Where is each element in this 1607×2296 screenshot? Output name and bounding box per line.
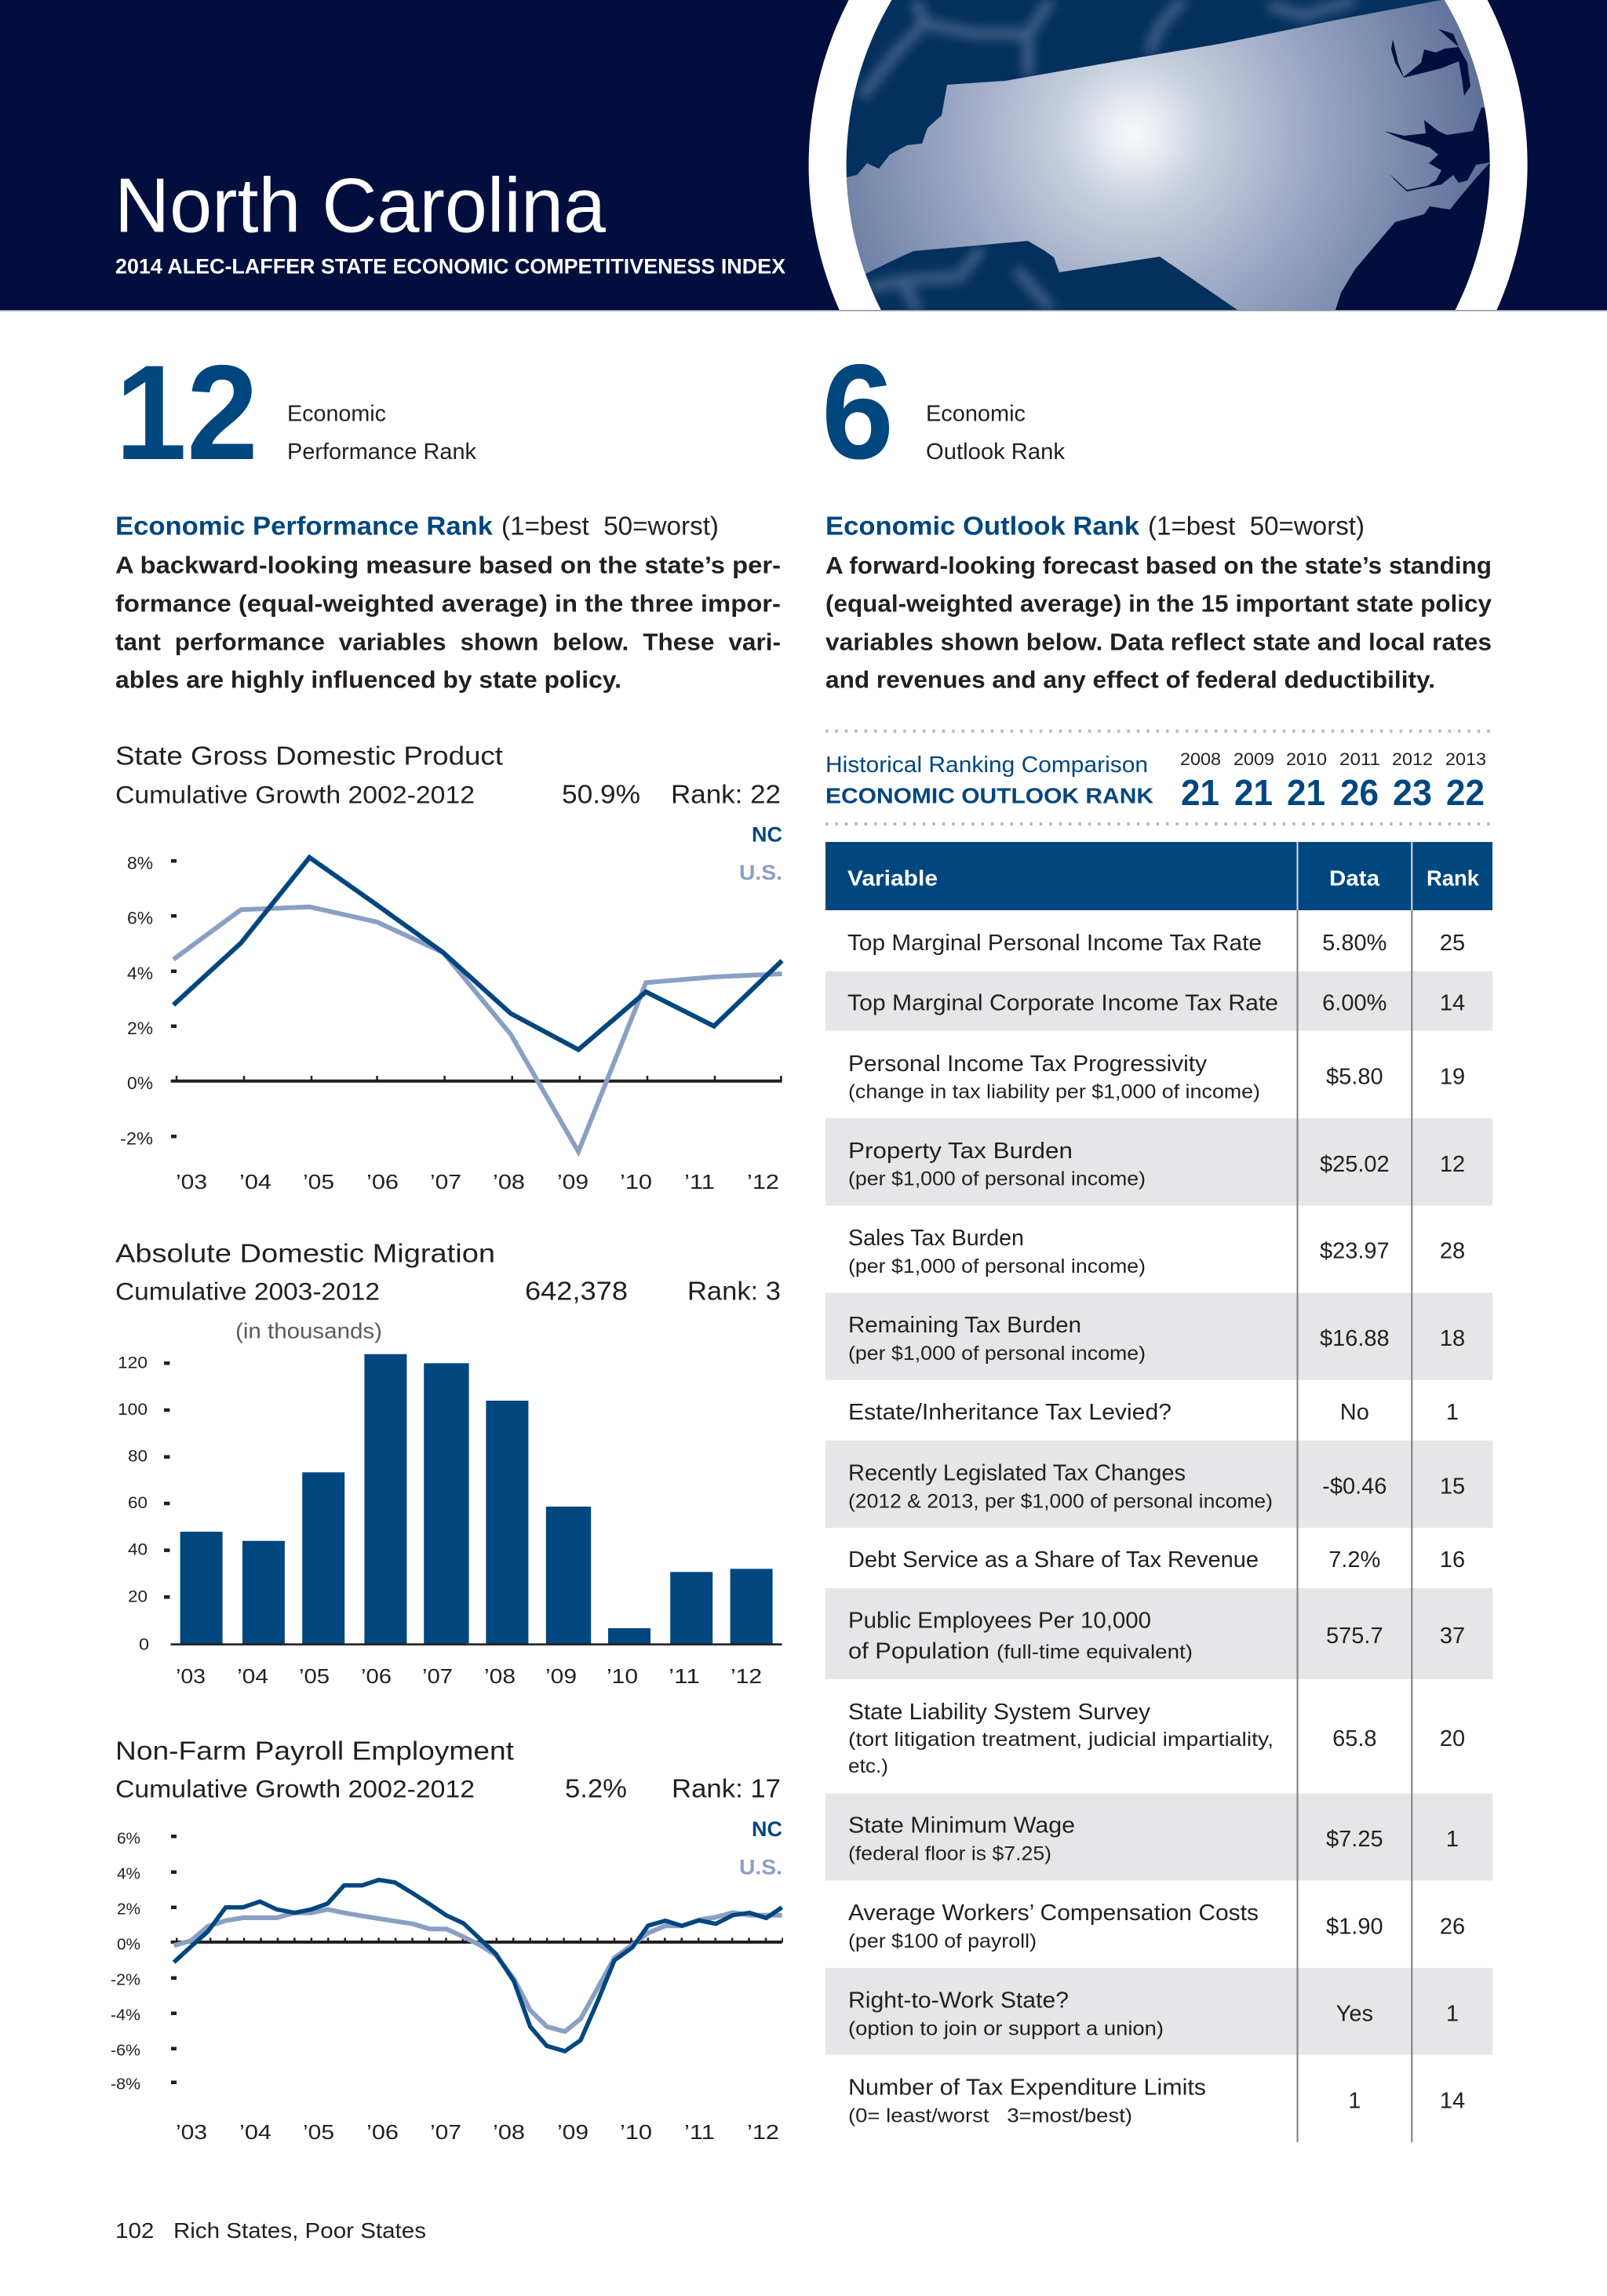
chart heading: domestic migration: (in thousands) [235, 1319, 382, 1343]
title: North Carolina [115, 162, 606, 249]
line chart: payroll employment: -6% [111, 2042, 140, 2059]
rank: economic outlook [822, 337, 1065, 487]
row: recent tax changes: Recently Legislated Tax Changes [848, 1460, 1186, 1485]
text block: performance rank description: Economic Performance Rank [115, 512, 494, 541]
line chart: state GDP growth: ’08 [493, 1170, 525, 1194]
row: liability survey: 65.8 [1332, 1726, 1377, 1751]
row: workers compensation: Average Workers’ Compensation Costs [848, 1901, 1259, 1926]
line chart: state GDP growth: ’06 [366, 1170, 399, 1194]
historical ranking comparison: 2008 [1180, 749, 1221, 769]
line chart: payroll employment: 4% [117, 1864, 140, 1883]
chart heading: state GDP: Cumulative Growth 2002-2012 [115, 780, 475, 808]
bar chart: domestic migration: ’09 [545, 1664, 577, 1688]
line chart: payroll employment: ’07 [430, 2120, 461, 2144]
text block: performance rank description: (1=best 50=worst) [501, 512, 719, 541]
historical ranking comparison: Historical Ranking Comparison [825, 753, 1148, 778]
row: remaining tax: 18 [1440, 1326, 1465, 1351]
historical ranking comparison: 2011 [1339, 749, 1380, 769]
text block: outlook rank description: (equal-weighted average) in the 15 important state policy [825, 589, 1492, 617]
row: recent tax changes: (2012 & 2013, per $1,000 of personal income) [848, 1490, 1273, 1512]
row: sales tax: $23.97 [1320, 1239, 1390, 1264]
row: personal income tax rate: 25 [1440, 931, 1465, 956]
bar chart: domestic migration: 60 [128, 1494, 148, 1512]
line chart: payroll employment: ’05 [303, 2120, 334, 2144]
line chart: state GDP growth: 6% [127, 909, 153, 928]
line chart: payroll employment: ’12 [747, 2120, 779, 2144]
line chart: payroll employment: ’03 [176, 2120, 207, 2144]
row: personal income tax rate: 5.80% [1322, 931, 1387, 956]
historical ranking comparison: 23 [1393, 772, 1432, 813]
row: workers compensation: 26 [1440, 1914, 1465, 1939]
bar chart: domestic migration: 80 [128, 1448, 148, 1466]
row: property tax [848, 1139, 1465, 1190]
chart heading: domestic migration: 642,378 [525, 1277, 628, 1306]
bar chart: domestic migration: 120 [118, 1354, 148, 1372]
row: liability survey [848, 1700, 1465, 1777]
row: minimum wage [848, 1813, 1459, 1865]
table header row [825, 842, 1492, 910]
row: sales tax: Sales Tax Burden [848, 1226, 1024, 1251]
chart heading: state GDP: 50.9% [562, 779, 640, 808]
historical ranking comparison: 21 [1287, 772, 1325, 813]
row: public employees: (full-time equivalent) [997, 1642, 1193, 1664]
line chart: payroll employment: ’09 [557, 2120, 589, 2144]
line chart: state GDP growth: -2% [120, 1128, 153, 1149]
historical ranking comparison: 21 [1234, 772, 1273, 813]
chart heading: domestic migration: Absolute Domestic Migration [115, 1238, 495, 1267]
text block: outlook rank description: Economic Outlook Rank [825, 512, 1140, 541]
historical ranking comparison: 2010 [1286, 749, 1327, 769]
table header row: Variable [847, 866, 938, 890]
chart heading: state GDP: State Gross Domestic Product [115, 741, 503, 770]
row: property tax: $25.02 [1320, 1152, 1390, 1177]
row: progressivity: Personal Income Tax Progressivity [848, 1051, 1208, 1077]
line chart: state GDP growth: NC [752, 822, 782, 846]
row: corporate income tax rate: 6.00% [1322, 991, 1387, 1016]
line chart: state GDP growth: 0% [127, 1073, 153, 1093]
chart heading: state GDP: Rank: 22 [671, 779, 781, 808]
rank: economic outlook: Outlook Rank [926, 439, 1065, 465]
text block: outlook rank description: A forward-looking forecast based on the state’s standing [825, 552, 1492, 579]
historical ranking comparison: 2013 [1445, 749, 1486, 769]
rank: economic outlook: Economic [926, 402, 1026, 427]
chart heading: payroll employment [115, 1736, 781, 1803]
bar chart: domestic migration: ’04 [237, 1664, 268, 1688]
line chart: payroll employment: 2% [117, 1901, 140, 1918]
line chart: state GDP growth: 8% [127, 854, 153, 873]
text block: outlook rank description: variables shown below. Data reflect state and local rates [825, 628, 1492, 655]
subtitle: 2014 ALEC-LAFFER STATE ECONOMIC COMPETITIVENESS INDEX [115, 254, 785, 278]
row: personal income tax rate: Top Marginal Personal Income Tax Rate [847, 931, 1262, 956]
chart heading: state GDP [115, 741, 781, 808]
line chart: state GDP growth: 4% [127, 964, 153, 983]
line chart: state GDP growth: ’03 [176, 1170, 207, 1194]
rank: economic performance: 12 [115, 337, 258, 488]
row: public employees: 575.7 [1326, 1624, 1383, 1649]
row: property tax: (per $1,000 of personal income) [848, 1168, 1146, 1190]
line chart: payroll employment: 0% [117, 1935, 140, 1954]
row: debt service [848, 1547, 1465, 1573]
chart heading: domestic migration [115, 1238, 781, 1343]
row: corporate income tax rate: Top Marginal Corporate Income Tax Rate [847, 991, 1278, 1016]
chart heading: payroll employment: Cumulative Growth 2002-2012 [115, 1775, 475, 1803]
row: right to work: Right-to-Work State? [848, 1988, 1069, 2014]
chart heading: payroll employment: Non-Farm Payroll Employment [115, 1736, 514, 1765]
row: liability survey: (tort litigation treatment, judicial impartiality, [848, 1729, 1274, 1751]
row: personal income tax rate [847, 931, 1465, 956]
table header row: Rank [1427, 866, 1479, 890]
bar chart: domestic migration: ’12 [731, 1664, 762, 1688]
row: workers compensation [848, 1901, 1465, 1952]
bar chart: domestic migration: 100 [118, 1401, 148, 1419]
bar chart: domestic migration: ’03 [176, 1664, 206, 1688]
row: public employees: of Population [848, 1639, 989, 1664]
row: debt service: 7.2% [1328, 1547, 1380, 1573]
bar chart: domestic migration [118, 1354, 782, 1688]
chart heading: domestic migration: Cumulative 2003-2012 [115, 1277, 380, 1306]
bar chart: domestic migration: ’10 [607, 1664, 638, 1688]
historical ranking comparison: 21 [1181, 772, 1219, 813]
row: public employees: Public Employees Per 10,000 [848, 1608, 1151, 1633]
row: estate tax: 1 [1446, 1400, 1459, 1425]
row: public employees [848, 1608, 1465, 1664]
row: estate tax: No [1340, 1400, 1369, 1425]
historical ranking comparison: 26 [1340, 772, 1379, 813]
line chart: payroll employment: ’04 [239, 2120, 271, 2144]
line chart: payroll employment: -8% [111, 2075, 140, 2094]
footer page number: 102 Rich States, Poor States [115, 2218, 426, 2243]
line chart: payroll employment: NC [752, 1817, 782, 1841]
row: minimum wage: $7.25 [1326, 1827, 1383, 1852]
chart heading: payroll employment: 5.2% [565, 1774, 627, 1803]
bar chart: domestic migration: ’11 [669, 1664, 700, 1688]
line chart: state GDP growth: ’10 [620, 1170, 652, 1194]
row: progressivity [848, 1051, 1465, 1102]
bar chart: domestic migration: 40 [128, 1541, 148, 1559]
row: workers compensation: (per $100 of payroll) [848, 1930, 1037, 1952]
text block: performance rank description: formance (equal-weighted average) in the three impor- [115, 589, 781, 617]
line chart: state GDP growth: ’09 [557, 1170, 589, 1194]
line chart: payroll employment: -4% [111, 2006, 140, 2024]
rank: economic performance [115, 337, 476, 488]
row: liability survey: State Liability System Survey [848, 1700, 1151, 1725]
text block: outlook rank description: (1=best 50=worst) [1148, 512, 1365, 541]
row: progressivity: 19 [1440, 1064, 1465, 1089]
historical ranking comparison: 2012 [1392, 749, 1433, 769]
row: workers compensation: $1.90 [1326, 1914, 1383, 1939]
row: progressivity: (change in tax liability per $1,000 of income) [848, 1081, 1260, 1102]
icon: North Carolina state map in circle [808, 0, 1528, 310]
chart heading: domestic migration: Rank: 3 [687, 1277, 781, 1306]
text block: outlook rank description [825, 512, 1492, 694]
historical ranking comparison [825, 731, 1493, 824]
rank: economic performance: Performance Rank [287, 439, 476, 465]
row: corporate income tax rate: 14 [1440, 991, 1465, 1016]
line chart: state GDP growth [120, 822, 782, 1194]
line chart: payroll employment: ’11 [684, 2120, 715, 2144]
row: progressivity: $5.80 [1326, 1064, 1383, 1089]
row: remaining tax: Remaining Tax Burden [848, 1313, 1081, 1338]
text block: performance rank description: A backward-looking measure based on the state’s per- [115, 552, 781, 579]
row: tax expenditure limits: Number of Tax Expenditure Limits [848, 2076, 1206, 2101]
line chart: payroll employment [111, 1817, 783, 2144]
bar chart: domestic migration: 20 [128, 1587, 148, 1605]
row: property tax: Property Tax Burden [848, 1139, 1073, 1164]
row: estate tax: Estate/Inheritance Tax Levied? [848, 1400, 1172, 1425]
row: property tax: 12 [1440, 1152, 1465, 1177]
row: remaining tax: (per $1,000 of personal income) [848, 1343, 1146, 1365]
row: minimum wage: (federal floor is $7.25) [848, 1843, 1051, 1865]
text block: performance rank description [115, 512, 781, 694]
row: liability survey: etc.) [848, 1755, 888, 1777]
table header row: Data [1329, 866, 1379, 890]
historical ranking comparison: 2009 [1233, 749, 1274, 769]
row: recent tax changes: 15 [1440, 1474, 1465, 1500]
row: tax expenditure limits: 1 [1348, 2088, 1361, 2113]
line chart: state GDP growth: ’04 [239, 1170, 271, 1194]
row: tax expenditure limits: (0= least/worst 3=most/best) [848, 2105, 1132, 2127]
row: sales tax: (per $1,000 of personal income) [848, 1256, 1146, 1277]
text block: outlook rank description: and revenues and any effect of federal deductibility. [825, 666, 1435, 694]
text block: performance rank description: ables are highly influenced by state policy. [115, 666, 621, 694]
row: right to work: 1 [1446, 2002, 1459, 2027]
row: sales tax [848, 1226, 1465, 1277]
line chart: payroll employment: ’06 [366, 2120, 399, 2144]
row: recent tax changes: -$0.46 [1322, 1474, 1387, 1500]
line chart: state GDP growth: ’05 [303, 1170, 334, 1194]
line chart: payroll employment: ’10 [620, 2120, 652, 2144]
row: right to work [848, 1988, 1459, 2040]
row: remaining tax: $16.88 [1320, 1326, 1390, 1351]
row: debt service: Debt Service as a Share of Tax Revenue [848, 1547, 1259, 1573]
line chart: payroll employment: U.S. [739, 1855, 782, 1879]
row: public employees: 37 [1440, 1624, 1465, 1649]
bar chart: domestic migration: ’05 [299, 1664, 330, 1688]
line chart: payroll employment: ’08 [493, 2120, 525, 2144]
row: estate tax [848, 1400, 1459, 1425]
header banner [0, 0, 1607, 311]
row: minimum wage: 1 [1446, 1827, 1459, 1852]
row: remaining tax [848, 1313, 1465, 1365]
row: minimum wage: State Minimum Wage [848, 1813, 1075, 1839]
row: recent tax changes [848, 1460, 1465, 1512]
line chart: state GDP growth: ’07 [430, 1170, 461, 1194]
row: tax expenditure limits [848, 2076, 1465, 2127]
row: tax expenditure limits: 14 [1440, 2088, 1465, 2113]
chart heading: payroll employment: Rank: 17 [672, 1774, 781, 1803]
row: liability survey: 20 [1440, 1726, 1465, 1751]
text block: performance rank description: tant performance variables shown below. These vari- [115, 628, 781, 655]
historical ranking comparison: ECONOMIC OUTLOOK RANK [825, 783, 1153, 807]
row: sales tax: 28 [1440, 1239, 1465, 1264]
rank: economic outlook: 6 [822, 337, 894, 487]
bar chart: domestic migration: ’06 [361, 1664, 392, 1688]
historical ranking comparison: 22 [1446, 772, 1485, 813]
line chart: state GDP growth: ’12 [747, 1170, 779, 1194]
line chart: state GDP growth: 2% [127, 1019, 153, 1038]
rank: economic performance: Economic [287, 402, 386, 427]
bar chart: domestic migration: 0 [139, 1636, 149, 1654]
row: right to work: Yes [1336, 2002, 1373, 2027]
line chart: state GDP growth: ’11 [684, 1170, 715, 1194]
row: corporate income tax rate [847, 991, 1465, 1016]
row: debt service: 16 [1440, 1547, 1465, 1573]
bar chart: domestic migration: ’07 [422, 1664, 453, 1688]
row: right to work: (option to join or support a union) [848, 2018, 1164, 2040]
bar chart: domestic migration: ’08 [484, 1664, 516, 1688]
line chart: state GDP growth: U.S. [739, 861, 782, 884]
table: state policy variables [825, 842, 1492, 2142]
line chart: payroll employment: -2% [111, 1971, 140, 1988]
line chart: payroll employment: 6% [117, 1830, 140, 1847]
